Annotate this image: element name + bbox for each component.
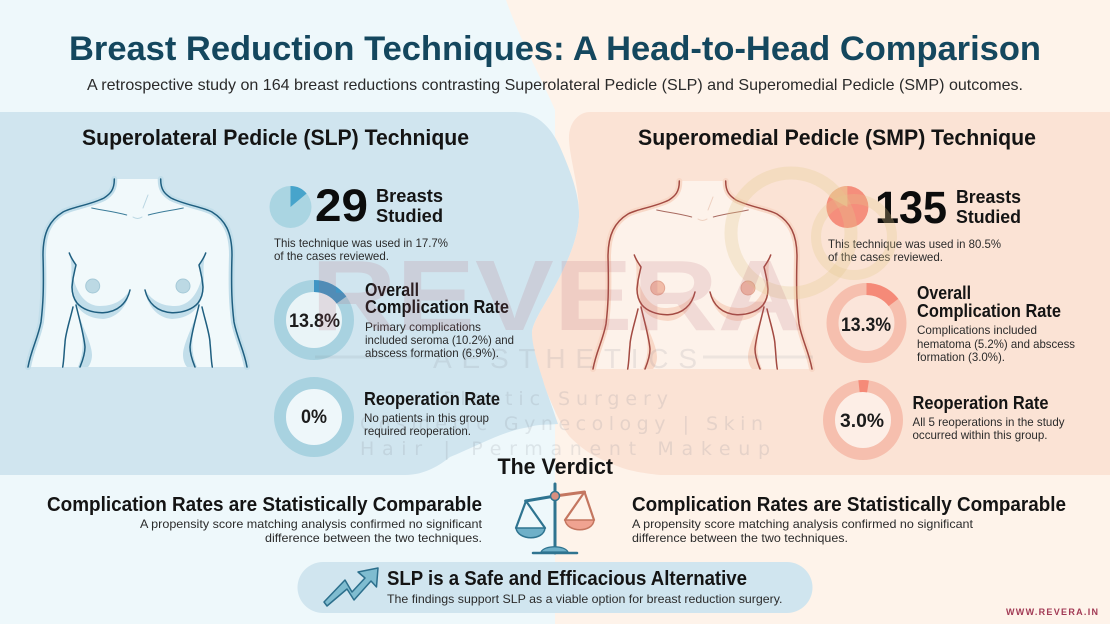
verdict: right finding — [632, 494, 1066, 545]
callout: SLP conclusion — [298, 562, 812, 613]
illustration: SLP torso — [28, 179, 247, 367]
text: reoperation detail — [364, 411, 489, 438]
text: complication detail: included seroma (10.2%) and — [365, 333, 514, 347]
text: complication detail — [917, 323, 1075, 364]
text: complication detail — [365, 320, 514, 360]
heading: overall complication rate: Overall — [365, 280, 419, 300]
text: complication detail: abscess formation (6.9%). — [365, 346, 499, 360]
text: reoperation detail: All 5 reoperations in the study — [912, 415, 1064, 429]
text: usage share: of the cases reviewed. — [274, 249, 389, 263]
title: Breast Reduction Techniques: A Head-to-Head Comparison — [69, 30, 1041, 68]
value: 3.0%: 3.0% — [840, 411, 884, 432]
label: breasts studied: Breasts — [956, 187, 1021, 207]
text: usage share: This technique was used in 80.5% — [828, 237, 1001, 251]
panel: SMP background — [532, 112, 1110, 475]
verdict: right finding: A propensity score matching analysis confirmed no significant — [632, 517, 974, 531]
text: reoperation detail — [912, 415, 1064, 442]
watermark: Revera Aesthetics logo: Plastic Surgery — [443, 388, 668, 410]
panel: SLP background — [0, 112, 579, 475]
verdict: left finding: A propensity score matching analysis confirmed no significant — [140, 517, 483, 531]
text: complication detail: Complications included — [917, 323, 1037, 337]
text: reoperation detail: required reoperation. — [364, 424, 471, 438]
heading: SLP technique: Superolateral Pedicle (SLP) Technique — [82, 125, 469, 150]
verdict: left finding: Complication Rates are Statistically Comparable — [47, 494, 482, 516]
donut chart: 13.8% — [280, 286, 348, 354]
verdict: left finding — [47, 494, 483, 545]
donut chart: 13.3% — [832, 289, 900, 357]
label: breasts studied: Studied — [376, 206, 443, 226]
value: 13.8%: 13.8% — [289, 311, 340, 332]
website url: WWW.REVERA.IN — [1006, 607, 1098, 617]
number: 29: 29 — [315, 180, 368, 231]
SMP stat: reoperation rate — [829, 386, 1064, 454]
heading: SMP technique: Superomedial Pedicle (SMP) Technique — [638, 125, 1036, 150]
heading: overall complication rate: Overall — [917, 283, 971, 303]
label: breasts studied: Studied — [956, 207, 1021, 227]
heading: overall complication rate — [365, 280, 509, 317]
subtitle: A retrospective study on 164 breast reductions contrasting Superolateral Pedicle (SLP) and Superomedial Pedicle (SMP) outcomes. — [87, 77, 1023, 94]
watermark: Revera Aesthetics logo — [311, 173, 892, 460]
heading: reoperation rate: Reoperation Rate — [912, 393, 1048, 413]
heading: overall complication rate: Complication Rate — [365, 297, 509, 317]
verdict: right finding: difference between the two techniques. — [632, 531, 848, 545]
SLP stat: breasts studied — [270, 180, 448, 263]
SMP stat: complication rate — [832, 283, 1075, 364]
text: usage share: This technique was used in 17.7% — [274, 236, 448, 250]
heading: overall complication rate — [917, 283, 1061, 321]
donut chart: 3.0% — [829, 386, 897, 454]
verdict: left finding: difference between the two techniques. — [265, 531, 482, 545]
pie chart: 80.5% — [826, 186, 868, 228]
SLP stat: reoperation rate — [280, 383, 500, 451]
text: complication detail: formation (3.0%). — [917, 350, 1005, 364]
value: 0%: 0% — [301, 407, 327, 428]
watermark: Revera Aesthetics logo: AESTHETICS — [433, 343, 697, 374]
label: breasts studied — [376, 186, 443, 226]
SLP stat: complication rate — [280, 280, 514, 360]
SMP stat: breasts studied — [826, 182, 1021, 264]
icon: trending up arrow — [324, 568, 378, 606]
verdict: right finding: Complication Rates are Statistically Comparable — [632, 494, 1066, 516]
text: complication detail: Primary complications — [365, 320, 481, 334]
donut chart: 0% — [280, 383, 348, 451]
heading: the verdict: The Verdict — [498, 454, 614, 479]
number: 135: 135 — [875, 182, 947, 233]
pie chart: 17.7% — [270, 186, 312, 228]
watermark: Revera Aesthetics logo: Cosmetic Gynecology | Skin — [360, 413, 763, 435]
text: reoperation detail: No patients in this group — [364, 411, 489, 425]
label: breasts studied: Breasts — [376, 186, 443, 206]
heading: reoperation rate: Reoperation Rate — [364, 389, 500, 409]
watermark: Revera Aesthetics logo: Hair | Permanent Makeup — [360, 438, 770, 460]
callout text: The findings support SLP as a viable option for breast reduction surgery. — [387, 592, 782, 606]
text: reoperation detail: occurred within this group. — [912, 428, 1048, 442]
text: usage share — [274, 236, 448, 263]
text: usage share — [828, 237, 1001, 264]
icon: balance scale — [516, 484, 594, 553]
heading: overall complication rate: Complication Rate — [917, 301, 1061, 321]
text: usage share: of the cases reviewed. — [828, 250, 943, 264]
illustration: SMP torso — [593, 181, 812, 369]
label: breasts studied — [956, 187, 1021, 227]
value: 13.3%: 13.3% — [841, 315, 891, 336]
watermark: Revera Aesthetics logo: REVERA — [311, 240, 803, 352]
callout heading: SLP is a Safe and Efficacious Alternative — [387, 568, 747, 590]
text: complication detail: hematoma (5.2%) and abscess — [917, 337, 1075, 351]
